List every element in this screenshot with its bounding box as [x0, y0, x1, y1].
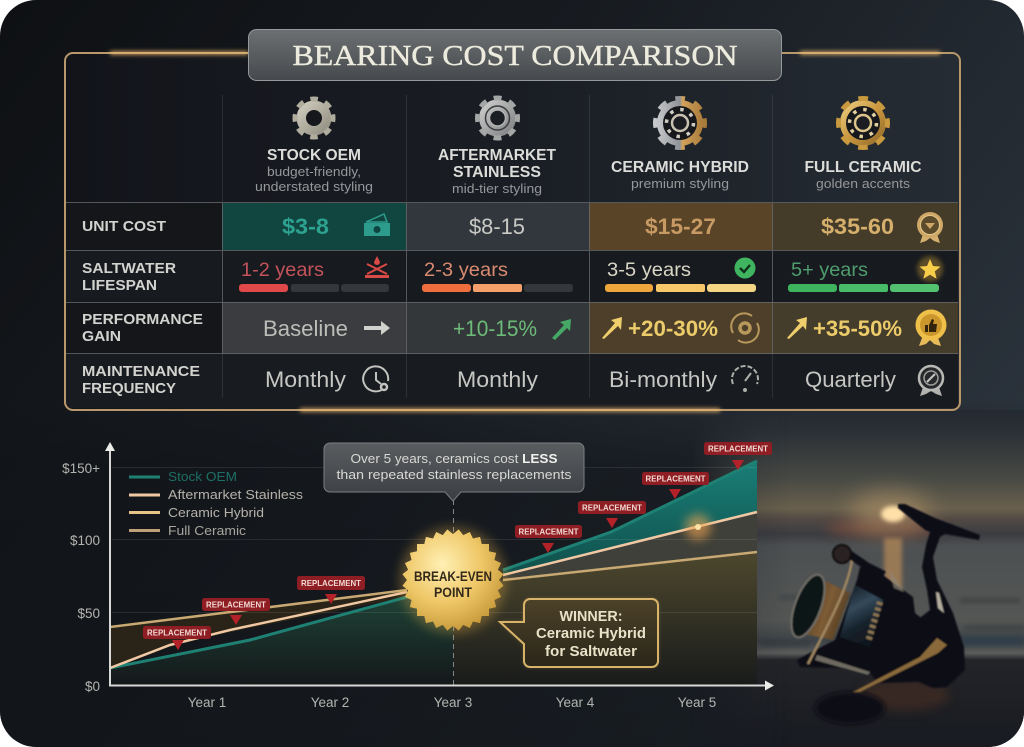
row: performance gain: +10-15%: [453, 316, 537, 341]
row labels: [82, 218, 203, 397]
icon: ringed steel gear: [478, 98, 518, 138]
icon: plain gear: [295, 99, 333, 137]
row: maintenance frequency: Monthly: [265, 367, 346, 392]
icon: gold rosette: [917, 212, 943, 243]
glow on line: [685, 514, 711, 540]
column: full ceramic: golden accents: [816, 176, 911, 191]
line: aftermarket stainless: [110, 512, 757, 668]
line: full ceramic: [110, 552, 757, 627]
row: maintenance frequency: Monthly: [457, 367, 538, 392]
icon: green up arrow: [552, 319, 571, 340]
icon: hybrid bearing gear: [656, 98, 704, 148]
row: maintenance frequency: [265, 366, 943, 396]
panel: comparison table: [65, 53, 960, 410]
row: unit cost: $8-15: [469, 214, 525, 239]
row labels: LIFESPAN: [82, 277, 157, 294]
legend: Full Ceramic: [168, 523, 247, 538]
row: unit cost: $35-60: [821, 214, 894, 239]
icon: silver badge: [919, 366, 943, 396]
callout: ceramics cost less: Over 5 years, ceramics cost LESS: [350, 451, 558, 466]
row: maintenance frequency: Quarterly: [805, 367, 896, 392]
legend: [129, 469, 304, 538]
stem and handle bar: [898, 504, 980, 688]
row: saltwater lifespan: 2-3 years: [424, 259, 508, 281]
lifespan bar: 1 of 3: [239, 284, 389, 292]
column: ceramic hybrid: [611, 98, 749, 191]
column: full ceramic: FULL CERAMIC: [804, 159, 922, 176]
bail arm: [808, 545, 884, 664]
y-axis labels: $50: [77, 606, 100, 621]
title: BEARING COST COMPARISON: [292, 40, 738, 72]
tag: REPLACEMENT: [646, 474, 706, 484]
row: performance gain: +35-50%: [813, 316, 902, 341]
row: saltwater lifespan: 3-5 years: [607, 259, 691, 281]
knob shadow: [815, 692, 885, 724]
column: aftermarket stainless: mid-tier styling: [452, 181, 542, 196]
tag: REPLACEMENT: [206, 600, 267, 610]
column: ceramic hybrid: premium styling: [631, 176, 729, 191]
row: saltwater lifespan: [239, 256, 943, 292]
gold handle: [853, 638, 947, 692]
tag: [297, 576, 365, 590]
column: stock OEM: budget-friendly,: [267, 164, 361, 179]
icon: salt splash: [365, 256, 389, 278]
row: unit cost: $3-8: [282, 214, 329, 239]
x-axis labels: Year 4: [556, 695, 595, 710]
row labels: PERFORMANCE: [82, 311, 203, 328]
row backgrounds: [222, 203, 958, 408]
y-axis labels: $100: [70, 533, 100, 548]
column: aftermarket stainless: STAINLESS: [453, 164, 541, 181]
column: aftermarket stainless: [438, 98, 557, 196]
tag: REPLACEMENT: [518, 526, 579, 536]
title: [248, 30, 782, 80]
lifespan bar: 2 of 3: [422, 284, 573, 292]
icon: thumbs-up medal: [916, 310, 946, 346]
row labels: MAINTENANCE: [82, 363, 200, 380]
tag: REPLACEMENT: [582, 502, 643, 512]
row: saltwater lifespan: 1-2 years: [241, 259, 324, 281]
icon: gear cycle: [731, 313, 759, 343]
y-axis labels: [62, 461, 100, 694]
axes: [105, 442, 774, 690]
chart area fills: [110, 461, 757, 685]
callout: ceramics cost less: [324, 443, 584, 501]
callout: winner: [500, 599, 658, 667]
callout: ceramics cost less: than repeated stainless replacements: [336, 467, 572, 482]
icon: gold up arrow: [602, 317, 622, 339]
y-axis labels: $0: [85, 679, 100, 694]
icon: clock with gear: [363, 366, 388, 391]
icon: check: [734, 258, 756, 278]
tag: REPLACEMENT: [147, 628, 208, 638]
row labels: SALTWATER: [82, 260, 176, 277]
photo: sunset beach background: [706, 424, 1024, 747]
column: stock OEM: understated styling: [255, 179, 373, 194]
column: stock OEM: [255, 99, 373, 194]
line: stock OEM: [110, 461, 757, 668]
chart: cost over five years: [62, 442, 774, 710]
lifespan bar: 3 of 3 amber: [605, 284, 756, 292]
column: ceramic hybrid: CERAMIC HYBRID: [611, 159, 749, 176]
callout: winner: WINNER:: [560, 609, 622, 625]
row: maintenance frequency: Bi-monthly: [609, 367, 717, 392]
x-axis labels: Year 5: [678, 695, 716, 710]
icon: cash: [364, 214, 390, 236]
spool: [800, 580, 850, 640]
column: stock OEM: STOCK OEM: [267, 147, 361, 164]
icon: golden bearing gear: [838, 98, 888, 148]
column: full ceramic: [804, 98, 922, 191]
legend: Aftermarket Stainless: [168, 487, 304, 502]
x-axis labels: [188, 695, 716, 710]
badge: break-even point: [399, 526, 507, 634]
icon: gauge: [732, 366, 758, 391]
icon: star: [917, 256, 943, 282]
badge: break-even point: POINT: [434, 584, 472, 600]
x-axis labels: Year 3: [434, 695, 472, 710]
table rules: [66, 95, 958, 398]
x-axis labels: Year 1: [188, 695, 226, 710]
icon: right arrow: [364, 321, 390, 335]
grid lines: [112, 468, 757, 612]
row labels: GAIN: [82, 328, 121, 345]
row: unit cost: [282, 212, 943, 243]
stem opening: [936, 592, 944, 613]
row labels: UNIT COST: [82, 218, 166, 235]
x-axis labels: Year 2: [311, 695, 349, 710]
foot plate highlight: [815, 655, 870, 675]
tag: REPLACEMENT: [301, 578, 362, 588]
tag: REPLACEMENT: [708, 444, 769, 454]
legend: Ceramic Hybrid: [168, 505, 264, 520]
callout: winner: for Saltwater: [545, 644, 637, 660]
badge: break-even point: BREAK-EVEN: [414, 568, 492, 584]
icon: gold up arrow: [787, 317, 807, 339]
row labels: FREQUENCY: [82, 380, 176, 397]
y-axis labels: $150+: [62, 461, 100, 476]
replacement markers: [143, 442, 772, 650]
column: aftermarket stainless: AFTERMARKET: [438, 147, 557, 164]
lifespan bar: 3 of 3 green: [788, 284, 939, 292]
rotor body: [797, 567, 945, 683]
main cylinder: [840, 585, 883, 647]
row: performance gain: Baseline: [263, 316, 348, 341]
callout: winner: Ceramic Hybrid: [536, 626, 646, 642]
row: unit cost: $15-27: [645, 214, 716, 239]
illustration: spinning reel: [784, 504, 980, 724]
dashed marker year 3: [452, 500, 454, 685]
legend: Stock OEM: [168, 469, 237, 484]
row: performance gain: +20-30%: [628, 316, 718, 341]
row: performance gain: [263, 310, 946, 346]
gold border: [65, 53, 960, 410]
row: saltwater lifespan: 5+ years: [791, 259, 868, 281]
